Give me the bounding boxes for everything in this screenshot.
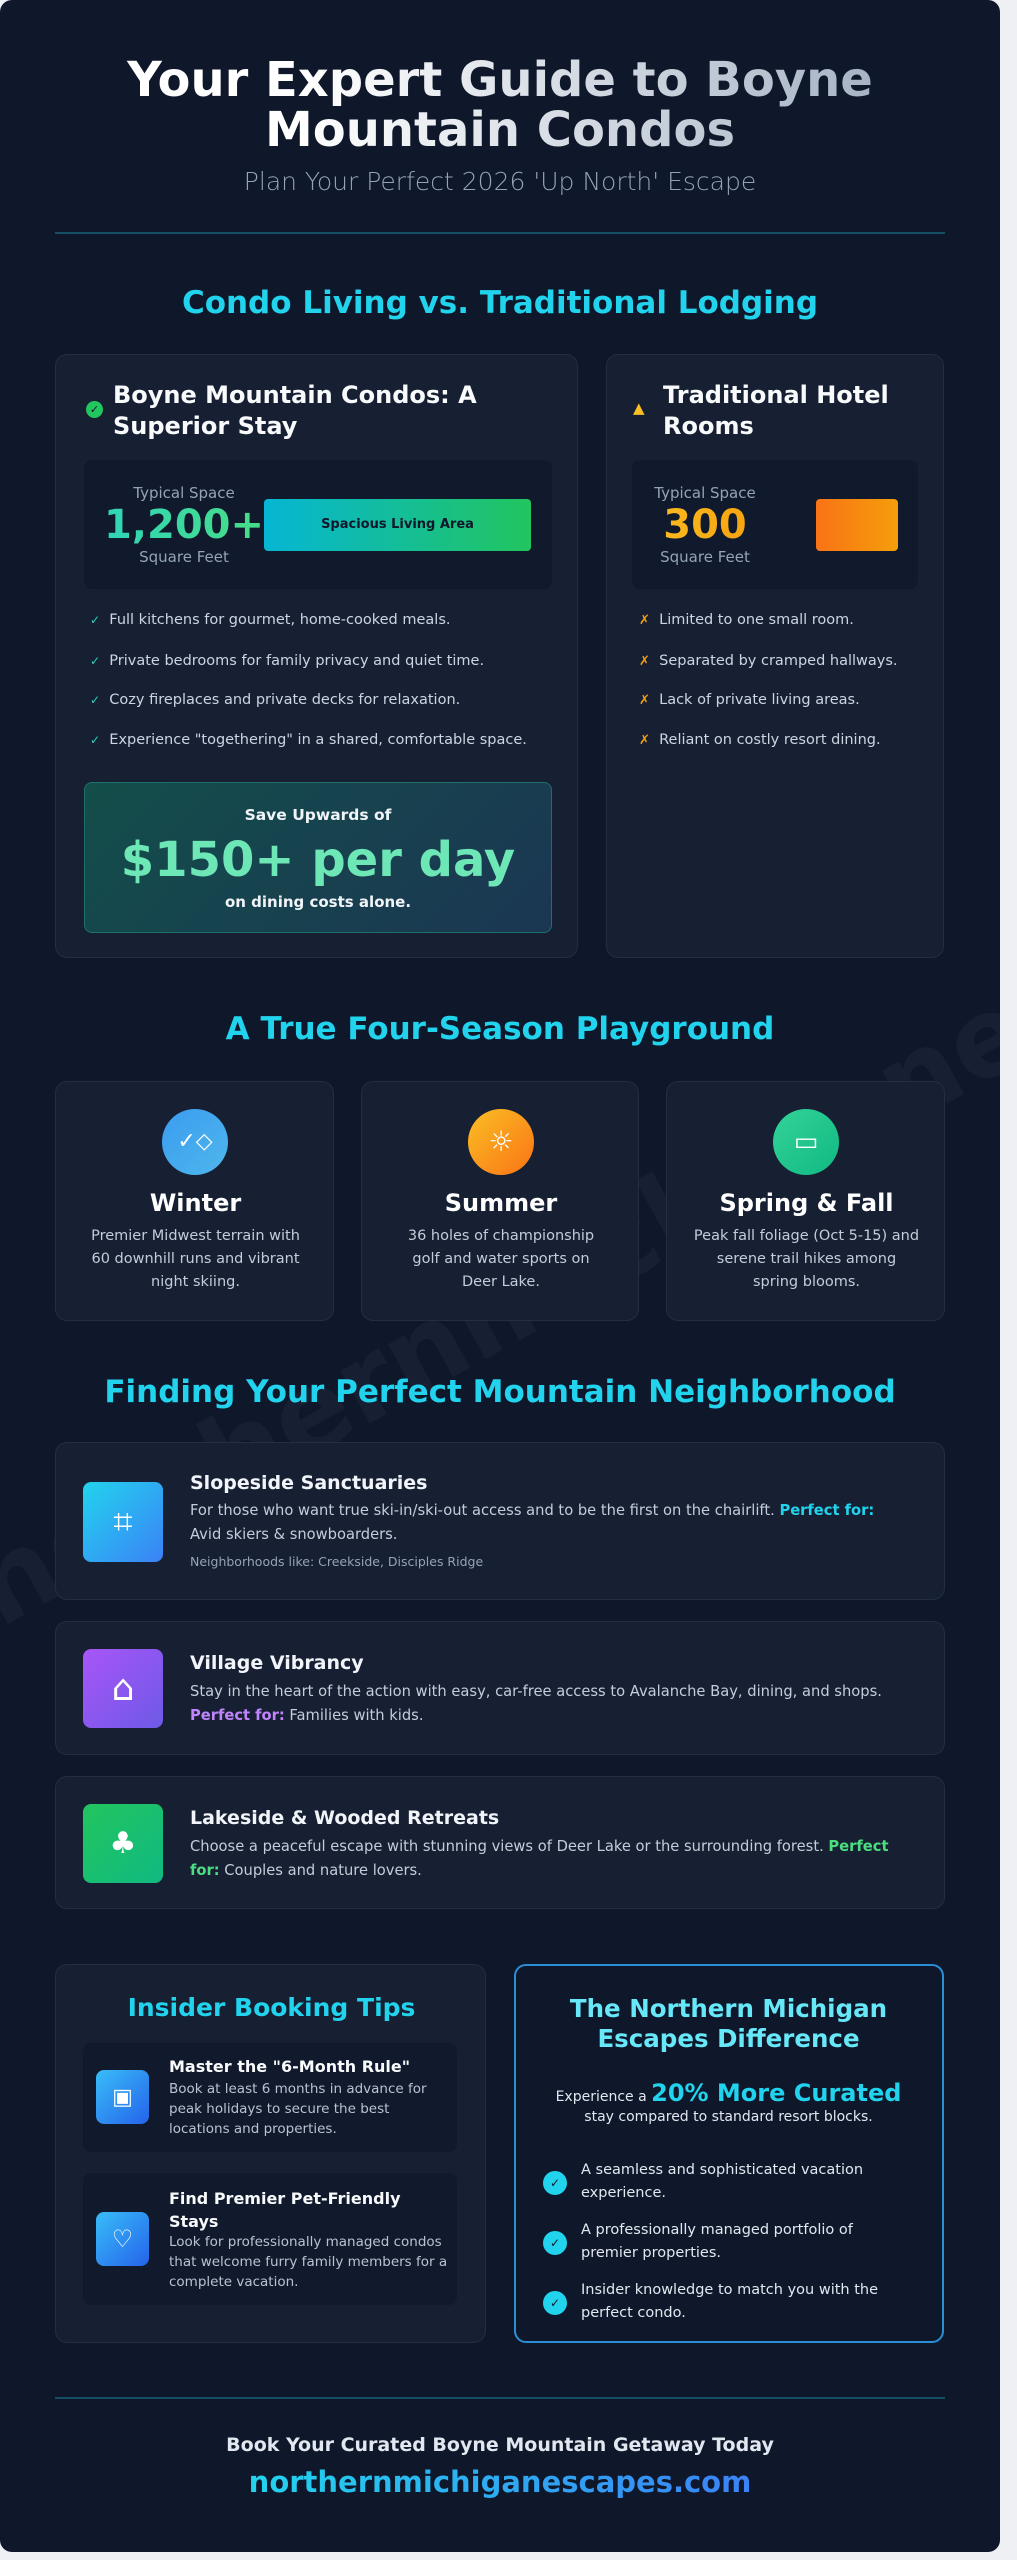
icon: heart: ♡: [112, 2225, 133, 2253]
heading: The Northern Michigan Escapes Difference: [570, 1994, 887, 2053]
bar: [816, 499, 898, 551]
panel: slopeside: [55, 1442, 945, 1600]
space comparison: Square Feet: [660, 548, 750, 566]
list: ✓ Full kitchens for gourmet, home-cooked meals.: [90, 612, 450, 628]
icon: house: [83, 1649, 163, 1728]
icon: map: [773, 1109, 839, 1175]
panel: condos: ✓ Experience "togethering" in a shared, comfortable space.: [90, 732, 527, 748]
panel: spring & fall: [666, 1081, 945, 1321]
panel: village: Village Vibrancy: [190, 1652, 364, 1674]
heading: condo vs lodging: Condo Living vs. Traditional Lodging: [182, 285, 818, 321]
panel: hotel: ✗ Separated by cramped hallways.: [639, 653, 898, 669]
panel: summer: Summer: [445, 1189, 557, 1217]
icon: winter: [162, 1109, 228, 1175]
space comparison: [632, 460, 918, 589]
panel: difference: A professionally managed portfolio of premier properties.: [581, 2222, 853, 2261]
panel: summer: 36 holes of championship golf and water sports on Deer Lake.: [408, 1228, 594, 1290]
space comparison: 300: [663, 502, 747, 548]
icon: check circle: ✓: [90, 403, 99, 416]
list: ✓: [550, 2176, 560, 2190]
tip: pets: Find Premier Pet-Friendly Stays: [169, 2189, 401, 2231]
space comparison: Square Feet: [139, 548, 229, 566]
icon: sun: ☼: [488, 1125, 514, 1158]
space comparison: [84, 460, 552, 589]
tip: 6-month: Book at least 6 months in advance for peak holidays to secure the best locations and properties.: [169, 2081, 427, 2137]
icon: trees: ♣: [110, 1826, 136, 1861]
footer url: northernmichiganescapes.com: [249, 2465, 751, 2499]
title: [0, 55, 1000, 155]
panel: slopeside: Slopeside Sanctuaries: [190, 1472, 427, 1494]
panel: booking tips: [55, 1964, 486, 2343]
panel title: Boyne Mountain Condos: A Superior Stay: [113, 381, 477, 440]
panel: spring & fall: Peak fall foliage (Oct 5-15) and serene trail hikes among spring blooms.: [694, 1228, 919, 1290]
panel: hotel: [606, 354, 944, 958]
heading: four seasons: A True Four-Season Playground: [226, 1011, 774, 1047]
callout: savings: $150+ per day: [121, 832, 515, 888]
panel: difference: [514, 1964, 944, 2343]
callout: savings: Save Upwards of: [245, 806, 391, 824]
panel title: Traditional Hotel Rooms: [663, 381, 889, 440]
icon: winter: ✓◇: [177, 1129, 213, 1154]
list: ✗ Limited to one small room.: [639, 612, 854, 628]
footer call to action: Book Your Curated Boyne Mountain Getaway Today: [226, 2434, 774, 2456]
icon: check circle: [86, 401, 103, 418]
icon: heart: [96, 2212, 149, 2266]
panel: hotel: ✗ Reliant on costly resort dining.: [639, 732, 881, 748]
space comparison: Typical Space: [133, 484, 235, 502]
panel: difference: ✓: [550, 2296, 560, 2310]
icon: sun: [468, 1109, 534, 1175]
panel: difference: Insider knowledge to match you with the perfect condo.: [581, 2282, 878, 2321]
callout: savings: on dining costs alone.: [225, 893, 411, 911]
tip: pets: [83, 2173, 457, 2305]
icon: trees: [83, 1804, 163, 1883]
panel: slopeside: Neighborhoods like: Creekside, Disciples Ridge: [190, 1554, 483, 1569]
panel: spring & fall: Spring & Fall: [719, 1189, 894, 1217]
bar: [264, 499, 531, 551]
panel: condos: [55, 354, 578, 958]
panel: lakeside: Choose a peaceful escape with stunning views of Deer Lake or the surrounding forest. Perfect for: Couples and nature lovers.: [190, 1838, 888, 1879]
panel: slopeside: For those who want true ski-in/ski-out access and to be the first on the chairlift. Perfect for: Avid skiers & snowboarders.: [190, 1502, 874, 1543]
panel: condos: ✓ Cozy fireplaces and private decks for relaxation.: [90, 692, 460, 708]
icon: calendar: [96, 2070, 149, 2124]
space comparison: 1,200+: [104, 502, 264, 548]
panel: difference: stay compared to standard resort blocks.: [584, 2109, 873, 2125]
heading: Insider Booking Tips: [128, 1993, 415, 2022]
panel: village: [55, 1621, 945, 1755]
panel: hotel: ✗ Lack of private living areas.: [639, 692, 860, 708]
panel: summer: [361, 1081, 639, 1321]
title: Mountain Condos: [265, 102, 735, 158]
heading: neighborhoods: Finding Your Perfect Mountain Neighborhood: [104, 1374, 896, 1410]
bar: Spacious Living Area: [321, 517, 474, 532]
tip: 6-month: [83, 2043, 457, 2152]
space comparison: Typical Space: [654, 484, 756, 502]
stat: Experience a 20% More Curated: [556, 2079, 901, 2107]
tip: pets: Look for professionally managed condos that welcome furry family members for a complete vacation.: [169, 2234, 447, 2290]
icon: calendar: ▣: [112, 2084, 133, 2110]
panel: difference: ✓: [550, 2236, 560, 2250]
title: Your Expert Guide to Boyne: [127, 52, 873, 108]
panel: village: Stay in the heart of the action with easy, car-free access to Avalanche Bay, dining, and shops. Perfect for: Families with kids.: [190, 1683, 882, 1724]
panel: condos: ✓ Private bedrooms for family privacy and quiet time.: [90, 653, 484, 669]
icon: map: ▭: [794, 1127, 818, 1157]
icon: house: ⌂: [112, 1668, 134, 1709]
icon: lift: [83, 1482, 163, 1562]
panel: winter: Premier Midwest terrain with 60 downhill runs and vibrant night skiing.: [91, 1228, 300, 1290]
icon: warning: ▲: [633, 399, 645, 417]
list: A seamless and sophisticated vacation experience.: [581, 2162, 863, 2201]
panel: winter: [55, 1081, 334, 1321]
panel: winter: Winter: [150, 1189, 241, 1217]
icon: lift: ⌗: [113, 1502, 133, 1542]
callout: savings: [84, 782, 552, 933]
subtitle: Plan Your Perfect 2026 'Up North' Escape: [244, 167, 756, 196]
panel: lakeside: [55, 1776, 945, 1909]
panel: lakeside: Lakeside & Wooded Retreats: [190, 1807, 499, 1829]
tip: 6-month: Master the "6-Month Rule": [169, 2057, 410, 2076]
